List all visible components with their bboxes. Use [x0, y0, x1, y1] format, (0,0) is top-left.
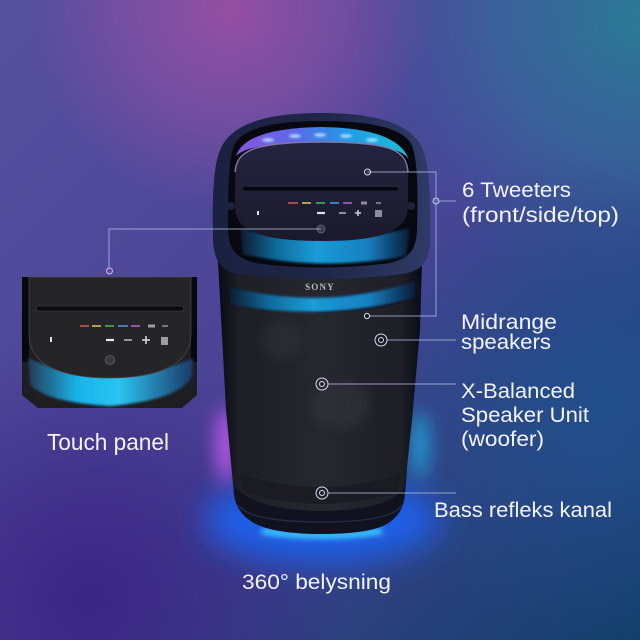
label: woofer: X-Balanced: [461, 379, 575, 403]
marker: woofer: [316, 378, 328, 390]
blue light band on body: [228, 281, 416, 312]
label: midrange: [461, 310, 557, 354]
marker: midrange: [375, 334, 387, 346]
inset light band: [28, 358, 193, 406]
base with under-glow: [232, 470, 407, 536]
marker: tweeters branch: [433, 198, 439, 204]
floor glow under speaker: [204, 407, 440, 564]
marker: tweeters: [364, 169, 370, 175]
marker: bass reflex: [316, 487, 328, 499]
power button: [317, 225, 325, 233]
label: woofer: Speaker Unit: [461, 403, 589, 427]
blue light band in opening: [240, 228, 410, 264]
touch panel: [227, 142, 415, 241]
label: woofer: (woofer): [461, 428, 544, 451]
top light strip: [236, 127, 409, 160]
label: midrange: speakers: [461, 330, 551, 354]
label: bass reflex: Bass refleks kanal: [434, 498, 612, 522]
label: tweeters: (front/side/top): [462, 204, 619, 227]
marker: lower tweeter: [364, 313, 370, 319]
inset power button: [106, 356, 114, 364]
inset panel: [29, 277, 191, 378]
SONY logo: SONY: [305, 282, 335, 292]
label: tweeters: 6 Tweeters: [462, 178, 571, 202]
label: touch panel: Touch panel: [47, 429, 169, 455]
speaker: [213, 113, 430, 536]
label: tweeters: [462, 178, 619, 227]
control lights: [258, 203, 382, 217]
top ring: [213, 113, 430, 278]
leader lines: [109, 172, 456, 493]
label: midrange: Midrange: [461, 310, 557, 334]
label: woofer: [461, 379, 589, 451]
label: 360 lighting: 360° belysning: [242, 570, 391, 594]
inset control lights: [51, 326, 168, 345]
ring opening: [228, 121, 417, 268]
inset: touch panel close-up: [22, 277, 197, 408]
speaker body with grille: [218, 262, 422, 511]
marker: touch panel: [106, 268, 112, 274]
